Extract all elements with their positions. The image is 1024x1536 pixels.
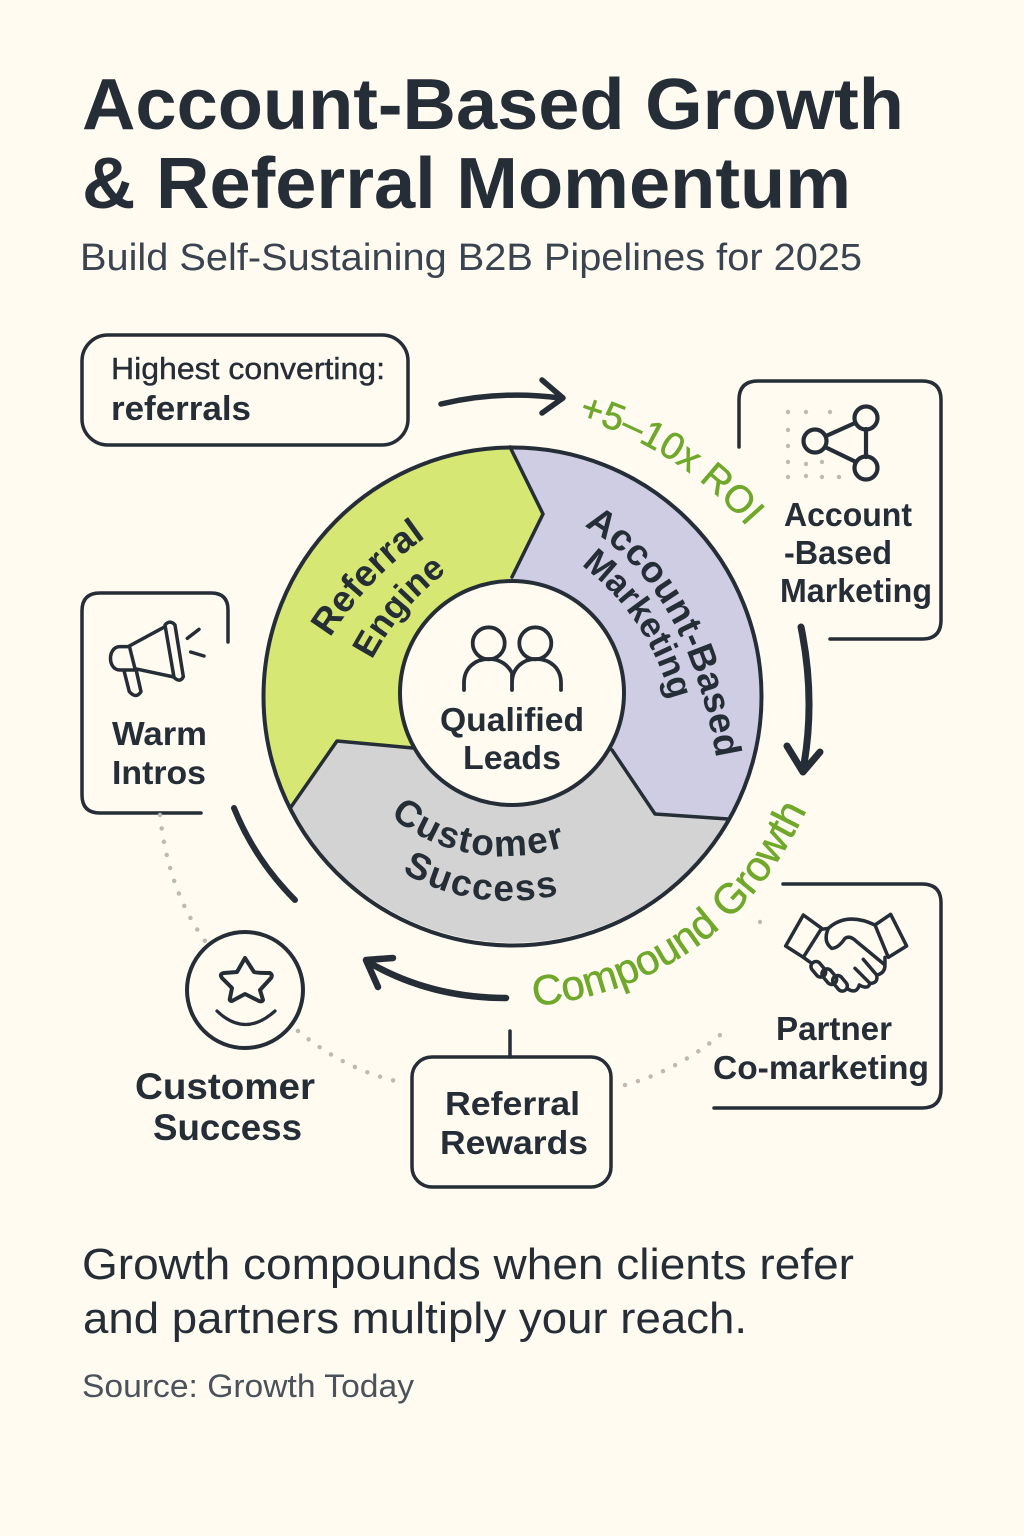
takeaway text xyxy=(82,1240,854,1343)
node: customer success xyxy=(135,932,315,1148)
icon: people xyxy=(464,627,561,690)
label: partner co-marketing xyxy=(713,1010,929,1086)
subtitle: Build Self-Sustaining B2B Pipelines for 2025 xyxy=(80,237,862,279)
segment: account-based marketing xyxy=(510,447,761,819)
center circle xyxy=(400,581,624,805)
arrow: to ROI xyxy=(441,380,563,413)
label: referral engine: Engine xyxy=(352,561,444,658)
label: qualified leads: Leads xyxy=(463,739,561,776)
icon: star smile xyxy=(187,932,303,1048)
outer ring xyxy=(264,448,762,946)
panel: partner co-marketing xyxy=(713,884,941,1108)
label: account-based marketing: -Based xyxy=(784,534,892,571)
panel: referral rewards xyxy=(412,1031,611,1187)
label: warm intros: Warm xyxy=(112,715,207,752)
ROI label: +5–10x ROI xyxy=(583,400,765,524)
takeaway text: and partners multiply your reach. xyxy=(83,1294,747,1343)
label: account-based marketing xyxy=(780,496,932,609)
arrow: bottom xyxy=(366,958,506,998)
label: referral engine: Referral xyxy=(310,517,424,636)
icon: handshake xyxy=(786,914,907,993)
label: qualified leads xyxy=(440,701,584,776)
segment: customer success xyxy=(291,693,728,943)
donut wheel xyxy=(262,445,764,948)
icon: megaphone xyxy=(110,622,204,695)
label: partner co-marketing: Partner xyxy=(776,1010,892,1047)
label: account-based marketing: Account xyxy=(784,496,912,533)
label: customer success xyxy=(396,800,560,902)
label: customer success xyxy=(135,1066,315,1148)
source: Source: Growth Today xyxy=(82,1368,414,1404)
label: account-based marketing: Marketing xyxy=(583,548,688,698)
title xyxy=(82,65,904,224)
takeaway text: Growth compounds when clients refer xyxy=(82,1240,854,1289)
dotted connectors xyxy=(160,815,762,1085)
panel: referral rewards: Referral xyxy=(445,1085,580,1122)
icon: network xyxy=(786,406,878,480)
callout: highest converting xyxy=(82,335,408,445)
label: account-based marketing: Account-Based xyxy=(585,510,742,756)
label: customer success: Customer xyxy=(135,1066,315,1107)
label: partner co-marketing: Co-marketing xyxy=(713,1049,929,1086)
title: Account-Based Growth xyxy=(82,65,904,145)
label: customer success: Success xyxy=(406,853,556,902)
segment borders xyxy=(291,447,728,819)
label: customer success: Customer xyxy=(396,800,560,857)
arrow: down right xyxy=(787,627,820,772)
label: customer success: Success xyxy=(153,1107,302,1148)
compound growth label: Compound Growth xyxy=(534,804,806,1005)
label: warm intros xyxy=(112,715,207,791)
label: qualified leads: Qualified xyxy=(440,701,584,738)
arrow: left arc xyxy=(234,808,295,900)
panel: referral rewards: Rewards xyxy=(440,1124,588,1161)
title: & Referral Momentum xyxy=(82,144,851,224)
label: warm intros: Intros xyxy=(112,754,206,791)
panel: warm intros xyxy=(82,593,228,813)
callout: highest converting: referrals xyxy=(111,390,251,428)
label: account-based marketing: Marketing xyxy=(780,572,932,609)
callout: highest converting: Highest converting: xyxy=(111,351,385,386)
segment: referral engine xyxy=(265,447,543,807)
panel: account-based marketing xyxy=(739,381,941,639)
